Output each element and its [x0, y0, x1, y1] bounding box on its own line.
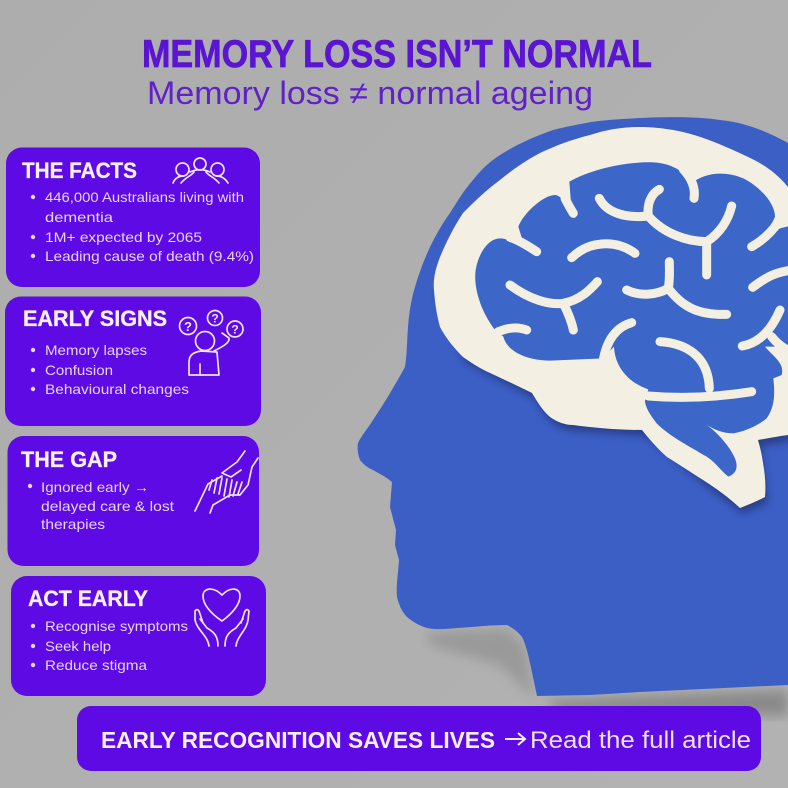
list: the gap: delayed care & lost: [41, 498, 174, 514]
icon: confused person with question marks: ?: [211, 312, 219, 326]
list: the gap: therapies: [41, 516, 105, 532]
list: facts: dementia: [45, 209, 113, 225]
head silhouette: [358, 117, 788, 696]
icon: helping hands: [195, 451, 258, 513]
list: act early: Reduce stigma: [45, 657, 147, 673]
illustration: head silhouette with paper brain: [358, 117, 788, 716]
list: facts: 446,000 Australians living with: [45, 189, 244, 205]
icon: hands holding heart: [195, 589, 249, 646]
banner link text: Read the full article: [530, 727, 751, 754]
heading: act early: ACT EARLY: [28, 586, 148, 611]
list: early signs: Confusion: [45, 362, 113, 378]
list: the gap: Ignored early →: [41, 479, 149, 495]
list: the gap: [28, 479, 174, 532]
list: early signs: [31, 342, 189, 397]
list: early signs: Memory lapses: [45, 342, 147, 358]
panel: early signs: [5, 296, 261, 426]
list: facts: Leading cause of death (9.4%): [45, 248, 254, 264]
heading: early signs: EARLY SIGNS: [23, 306, 167, 331]
list: act early: [31, 618, 188, 673]
arrow: [505, 733, 525, 745]
heading: the gap: THE GAP: [21, 447, 117, 472]
banner: call to action: [77, 706, 761, 771]
panel: act early: [11, 576, 266, 696]
panel: the gap: [8, 436, 259, 566]
icon: confused person with question marks: [180, 310, 243, 375]
banner headline: EARLY RECOGNITION SAVES LIVES: [101, 727, 495, 753]
title: MEMORY LOSS ISN’T NORMAL: [142, 33, 652, 76]
list: facts: 1M+ expected by 2065: [45, 229, 202, 245]
heading: the facts: THE FACTS: [22, 158, 137, 183]
brain folds: [475, 162, 788, 477]
icon: confused person with question marks: ?: [231, 322, 239, 336]
brain cream outline: [434, 127, 788, 508]
icon: confused person with question marks: ?: [184, 319, 192, 334]
subtitle: Memory loss ≠ normal ageing: [147, 75, 593, 111]
panel: the facts: [6, 148, 260, 287]
list: early signs: Behavioural changes: [45, 381, 189, 397]
list: act early: Recognise symptoms: [45, 618, 188, 634]
icon: group of people: [173, 158, 228, 183]
list: act early: Seek help: [45, 638, 111, 654]
list: facts: [31, 189, 254, 264]
